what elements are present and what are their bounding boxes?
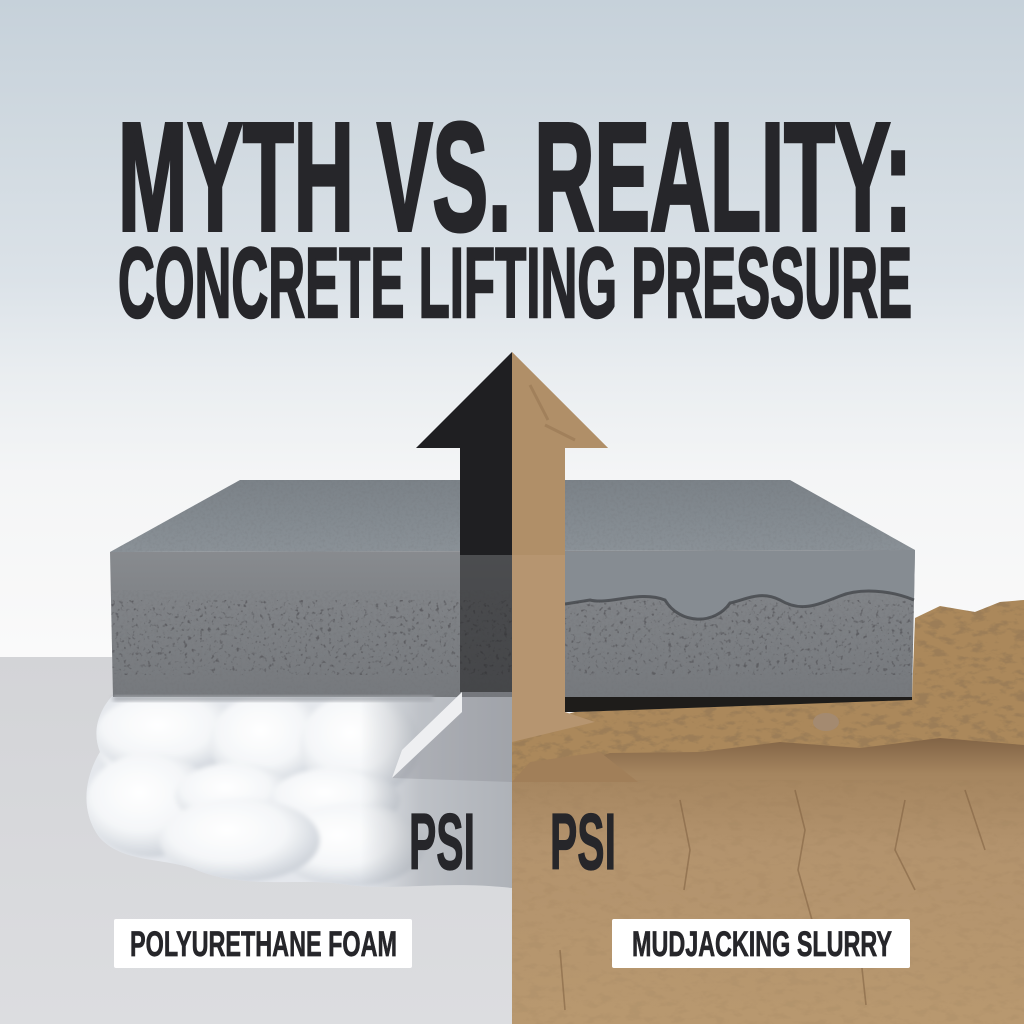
arrow: reality, tan half — [512, 352, 638, 782]
foam: polyurethane blob — [85, 685, 512, 895]
mud slurry layer — [512, 596, 1024, 786]
title — [118, 91, 912, 338]
label: polyurethane foam — [114, 919, 412, 968]
mud drip over slab right — [565, 550, 915, 619]
slab top face — [110, 480, 915, 552]
slab front face — [110, 550, 915, 701]
psi label: foam side: PSI — [409, 797, 475, 886]
label: mudjacking slurry: MUDJACKING SLURRY — [632, 925, 892, 964]
soil panel: mudjacking side — [512, 730, 1024, 1024]
psi label: mudjacking side: PSI — [550, 797, 616, 886]
shadow under slab — [565, 697, 912, 712]
arrow: myth, black half — [392, 352, 512, 782]
label: polyurethane foam: POLYURETHANE FOAM — [130, 925, 397, 964]
label: mudjacking slurry — [612, 919, 910, 968]
